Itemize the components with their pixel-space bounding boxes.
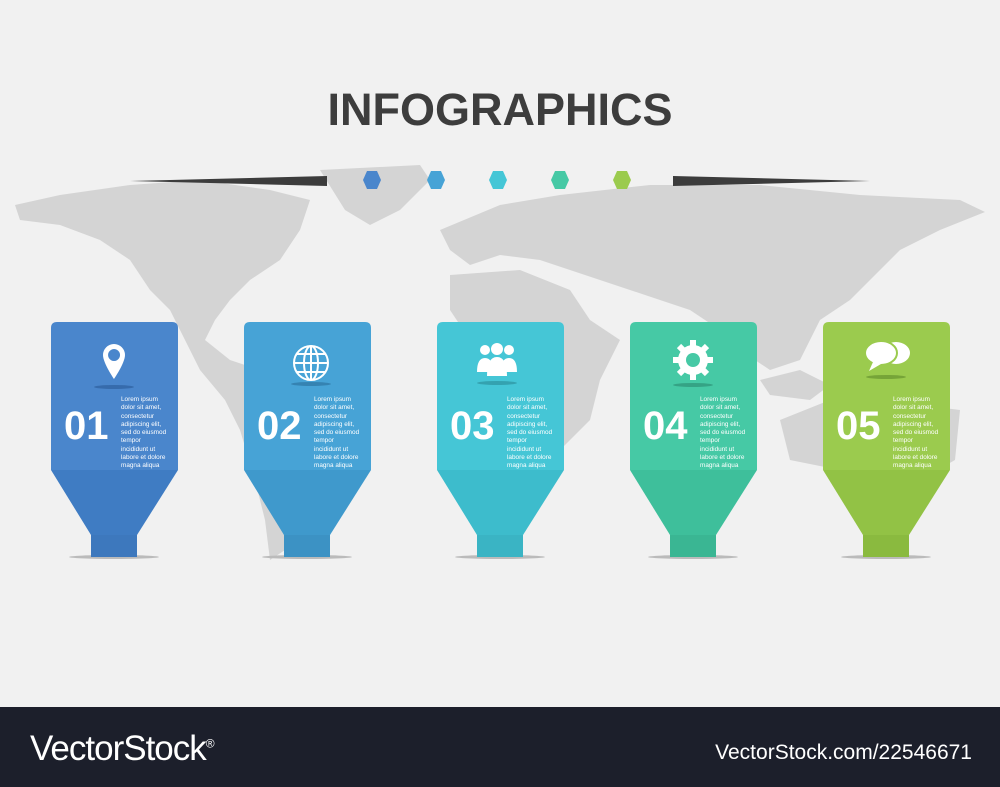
icon: people group	[477, 343, 517, 376]
card 3: Lorem ipsum dolor sit amet, consectetur adipiscing elit, sed do eiusmod tempor incididunt ut labore et dolore magna aliqua	[507, 396, 552, 469]
card 4: 04	[643, 404, 688, 448]
footer logo: VectorStock®	[30, 729, 214, 768]
card 1	[51, 322, 178, 559]
card 2	[244, 322, 371, 559]
card 3	[437, 322, 564, 559]
footer id: VectorStock.com/22546671	[715, 741, 972, 764]
card 4: Lorem ipsum dolor sit amet, consectetur adipiscing elit, sed do eiusmod tempor incididunt ut labore et dolore magna aliqua	[700, 396, 745, 469]
footer bar	[0, 707, 1000, 787]
icon: speech bubbles	[865, 341, 910, 371]
hexagon dots	[363, 171, 631, 189]
card 5: Lorem ipsum dolor sit amet, consectetur adipiscing elit, sed do eiusmod tempor incididunt ut labore et dolore magna aliqua	[893, 396, 938, 469]
icon: globe	[294, 346, 328, 380]
icon: gear	[673, 340, 713, 380]
card 2: Lorem ipsum dolor sit amet, consectetur adipiscing elit, sed do eiusmod tempor incididunt ut labore et dolore magna aliqua	[314, 396, 359, 469]
icon: location pin	[103, 344, 125, 379]
card 4	[630, 322, 757, 559]
title: INFOGRAPHICS	[327, 84, 672, 135]
card 1: 01	[64, 404, 108, 448]
card 1: Lorem ipsum dolor sit amet, consectetur adipiscing elit, sed do eiusmod tempor incididunt ut labore et dolore magna aliqua	[121, 396, 166, 469]
decorative pointers	[130, 176, 327, 186]
card 3: 03	[450, 404, 494, 448]
card 5: 05	[836, 404, 880, 448]
card 5	[823, 322, 950, 559]
card 2: 02	[257, 404, 302, 448]
